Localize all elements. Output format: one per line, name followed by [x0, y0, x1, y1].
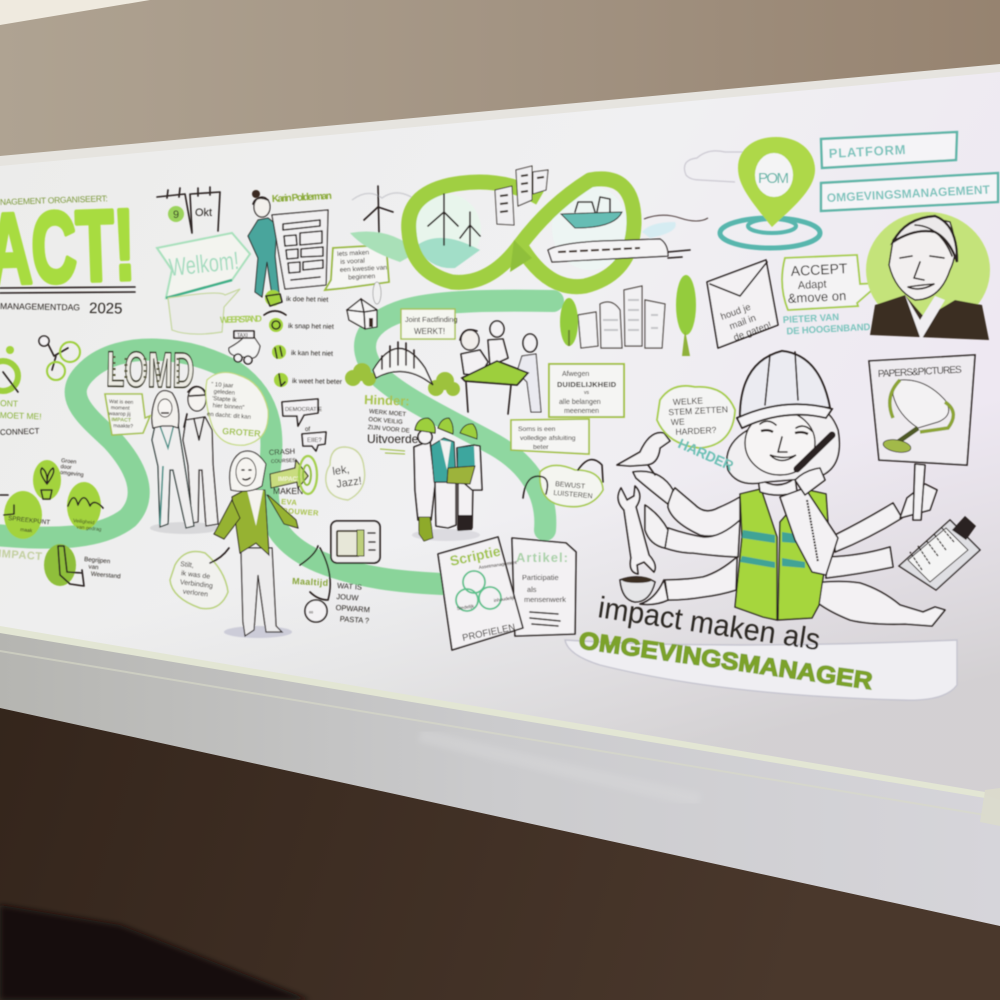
title block [0, 189, 137, 318]
democratie bubble: of [305, 427, 310, 433]
pale bubble [565, 640, 957, 700]
speech cloud: welke stem: WE [671, 416, 685, 427]
welkom banner [157, 233, 250, 298]
workers [412, 418, 482, 541]
taxi: TAXI [237, 333, 248, 339]
speech: impact moment: maakte? [113, 423, 133, 430]
books: Assetmanagement [478, 560, 518, 570]
envelope: houd je [719, 302, 752, 323]
trophy [882, 380, 953, 454]
speech cloud: welke stem: WELKE [673, 395, 703, 407]
calendar [157, 187, 220, 233]
tree 2 [676, 275, 696, 335]
bushes [345, 363, 460, 396]
boot icon: Weerstand [91, 571, 121, 580]
scriptie [438, 537, 523, 650]
target icon [0, 346, 18, 392]
speech: impact moment [105, 394, 150, 435]
books: Stedelijk [456, 604, 475, 611]
pasta plate and text: PASTA ? [340, 614, 369, 625]
platform tags [821, 132, 998, 211]
floor shadow [150, 522, 220, 534]
trousers [241, 548, 282, 636]
hinder text: Hinder: [364, 392, 410, 409]
cloud: groter: en dacht: dit kan [207, 412, 251, 421]
speech cloud: welke stem [657, 386, 735, 448]
speech: beginnen: beginnen [348, 273, 376, 281]
weerstand speech bubble: WEERSTAND [220, 314, 263, 325]
cloud: lekker jazz: lek, [332, 464, 350, 478]
crash course arrow: MAKEN [273, 486, 303, 496]
man presenter [183, 417, 218, 526]
clipboard [899, 520, 980, 590]
board [869, 355, 975, 465]
shoulders [870, 295, 989, 340]
bridge arch [373, 348, 433, 385]
pasta plate and text: WAT IS [337, 581, 362, 592]
halo [866, 212, 990, 328]
papers and pictures sign [869, 355, 975, 520]
afwegen box [549, 364, 624, 417]
cloud: groter: GROTER [222, 426, 261, 439]
accept bubble [782, 255, 880, 310]
bike [39, 336, 80, 380]
speech: impact moment: IMPACT [111, 417, 132, 424]
cloud: groter: hier binnen" [212, 403, 245, 411]
pieter name: PIETER VAN [783, 312, 840, 326]
books: mensenwerk [524, 595, 566, 604]
pasta plate and text: JOUW [336, 592, 360, 603]
pom pin: POM [758, 170, 789, 187]
pasta plate and text: ∞ [309, 610, 313, 616]
left pool [413, 194, 481, 266]
books: Scriptie [448, 543, 502, 569]
accept bubble: &move on [787, 288, 847, 306]
platform tags: OMGEVINGSMANAGEMENT [826, 182, 991, 205]
plant icon: door [60, 464, 72, 471]
artikel [512, 538, 576, 636]
train [548, 239, 668, 262]
speech cloud: welke stem: STEM ZETTEN [668, 404, 728, 417]
script line: impact maken als [596, 591, 822, 657]
democratie bubble: DEMOCRATIE [285, 407, 322, 413]
title overline: NAGEMENT ORGANISEERT: [0, 193, 108, 207]
pieter name: DE HOOGENBAND [786, 322, 871, 337]
hair [893, 216, 957, 262]
waves icon [67, 482, 103, 533]
phone [797, 435, 832, 469]
pom pin [684, 137, 820, 248]
afwegen box: alle belangen [559, 399, 601, 406]
phone arm [780, 488, 838, 575]
bridge and bushes [345, 342, 460, 396]
LOMD lettering: LOMD [106, 341, 195, 399]
city [495, 166, 548, 225]
books: PROFIELEN [461, 622, 516, 644]
bewust luisteren: LUISTEREN [553, 490, 593, 500]
year: 2025 [89, 300, 123, 318]
weerstand speech bubble [168, 289, 263, 334]
boot icon: Begrijpen [84, 556, 110, 565]
hinder text: OOK VEILIG [368, 417, 403, 426]
democratie bubble [282, 399, 326, 451]
face details [900, 256, 944, 280]
calendar: Okt [195, 207, 212, 219]
house [347, 282, 381, 329]
taxi [229, 331, 260, 364]
turbines inside loop [428, 194, 480, 246]
cloud: verbinding verloren: verloren [182, 589, 208, 599]
portrait [866, 212, 990, 340]
cloud: verbinding verloren [170, 548, 229, 609]
microwave [331, 521, 380, 563]
connect text: MOET ME! [0, 410, 42, 421]
face [236, 458, 256, 486]
left column icons: CONNECT [0, 427, 40, 437]
face [745, 411, 815, 475]
speech: impact moment: Wat is een [109, 399, 134, 406]
boot icon [44, 544, 123, 586]
soms box: volledige afsluiting [520, 435, 576, 442]
wind turbine and hill [350, 186, 422, 262]
soms box: Soms is een [518, 426, 556, 433]
woman presenter [152, 424, 194, 528]
speech: beginnen: Iets maken [337, 249, 370, 258]
soms box [511, 419, 589, 454]
flip chart [272, 210, 328, 289]
cloud: lekker jazz: Jazz! [336, 475, 363, 491]
table top and legs [462, 361, 528, 385]
speech: beginnen: een kwestie van [340, 264, 387, 274]
books [438, 537, 576, 650]
city and trees [560, 275, 696, 356]
cloud: lekker jazz [326, 447, 365, 500]
spreekpunt icon [0, 491, 50, 539]
books: als [527, 585, 537, 594]
books: Artikel: [516, 550, 568, 565]
bewust luisteren: BEWUST [555, 481, 586, 491]
afwegen box: vs [584, 390, 590, 396]
people behind table [461, 330, 479, 350]
calendar: 9 [173, 209, 179, 221]
crash course arrow: COURSES [271, 458, 296, 465]
multitasking woman [617, 351, 980, 626]
waves icon: van gedrag [76, 524, 102, 533]
vest [735, 489, 777, 620]
joint factfinding note: WERKT! [414, 327, 445, 336]
arms [668, 488, 740, 536]
blazer and arms [232, 490, 269, 555]
hinder text: ZIJN VOOR DE [367, 425, 410, 435]
hinder text: WERK MOET [369, 409, 407, 418]
cloud: groter: geleden [213, 389, 235, 397]
shoreline [644, 215, 708, 221]
cloud: groter: " 10 jaar [211, 382, 233, 390]
head [889, 219, 955, 300]
checklist: vier redenen [264, 290, 343, 387]
collar [758, 478, 797, 495]
speech cloud: welke stem: HARDER? [675, 425, 717, 437]
afwegen box: Afwegen [562, 371, 589, 378]
item 4: ik weet het beter [292, 378, 343, 386]
footer title [565, 591, 957, 700]
rings [720, 218, 820, 248]
item 1: ik doe het niet [286, 296, 329, 304]
paper sheet [0, 64, 1000, 826]
cloud: verbinding verloren: Stilt, [180, 561, 194, 570]
hinder text [364, 392, 422, 454]
title rule [0, 287, 135, 293]
river left [0, 350, 442, 584]
crash course arrow: CRASH [269, 447, 295, 457]
accept bubble: ACCEPT [790, 260, 848, 279]
plant icon: omgeving [60, 470, 84, 478]
books: inhoudelijk [493, 595, 516, 603]
wrench [618, 486, 655, 574]
afwegen box: meenemen [564, 408, 599, 415]
left worker [414, 441, 435, 520]
connect text: ONT [0, 398, 18, 409]
welkom banner: Welkom! [168, 247, 240, 282]
eva brouwer figure [214, 451, 298, 638]
helmet [740, 351, 830, 417]
item 3: ik kan het niet [291, 350, 333, 358]
plan [447, 466, 475, 484]
cloud: verbinding verloren: Verbinding [180, 579, 213, 590]
plant icon: Groen [61, 458, 77, 466]
books: Participatie [522, 573, 559, 582]
LOMD lettering [106, 341, 195, 399]
coffee cup [620, 577, 655, 602]
soms box: beter [533, 444, 549, 451]
ship [561, 212, 622, 228]
cloud [684, 151, 745, 182]
envelope: mail in [728, 313, 758, 332]
bird [617, 433, 670, 466]
crash course arrow [269, 447, 317, 496]
subtitle: MANAGEMENTDAG [0, 301, 80, 312]
crash course arrow: IMPACT [278, 477, 301, 483]
hinder text: Uitvoerder [367, 432, 422, 446]
speech: impact moment: waarop jij [109, 411, 131, 418]
eva brouwer name: EVA [281, 497, 298, 507]
pasta plate and text [292, 546, 372, 625]
handle [913, 464, 925, 520]
spreekpunt icon: SPREEKPUNT [8, 515, 50, 526]
item 2: ik snap het niet [288, 323, 334, 331]
joint factfinding note: Joint Factfinding [405, 315, 457, 324]
democratie bubble: EIIE? [307, 438, 322, 444]
speech: beginnen [325, 245, 389, 290]
tree 1 [560, 298, 578, 346]
platform tags: PLATFORM [828, 142, 907, 161]
marker [738, 137, 815, 227]
right worker [458, 478, 473, 530]
harder label: HARDER [676, 435, 736, 474]
pasta plate and text: Maaltijd [292, 576, 328, 588]
waves icon: Veiligheid [73, 518, 95, 526]
shadow [224, 626, 292, 638]
hair [230, 451, 266, 491]
speech: impact moment: moment [111, 405, 130, 412]
hands [633, 471, 673, 504]
two presenters [150, 386, 220, 534]
eva brouwer name: BROUWER [276, 506, 319, 518]
envelope [707, 260, 778, 348]
pasta plate and text: OPWARM [335, 603, 370, 614]
river right [365, 301, 553, 530]
cloud: groter: 'Stapte ik [212, 396, 238, 404]
papers and pictures sign: PAPERS&PICTURES [878, 365, 962, 380]
cloud: groter [206, 372, 268, 445]
plant icon [33, 458, 85, 500]
name: Karin Polderman [272, 191, 332, 205]
cloud: verbinding verloren: ik was de [181, 570, 211, 581]
accept bubble: Adapt [798, 279, 827, 292]
spreekpunt icon: maak [20, 527, 33, 534]
hair [727, 410, 839, 484]
boot icon: van [88, 563, 99, 571]
middle worker [435, 482, 456, 528]
figure [248, 218, 279, 297]
joint factfinding note [401, 309, 457, 339]
infinity loop [409, 166, 708, 287]
table scene [460, 321, 541, 414]
karin polderman [248, 190, 332, 297]
bewust luisteren [523, 460, 603, 507]
left column icons [0, 336, 123, 586]
afwegen box: DUIDELIJKHEID [557, 380, 617, 389]
speech: beginnen: is vooral [340, 258, 366, 266]
envelope: de gaten! [732, 320, 773, 344]
bold line: OMGEVINGSMANAGER [577, 627, 874, 695]
